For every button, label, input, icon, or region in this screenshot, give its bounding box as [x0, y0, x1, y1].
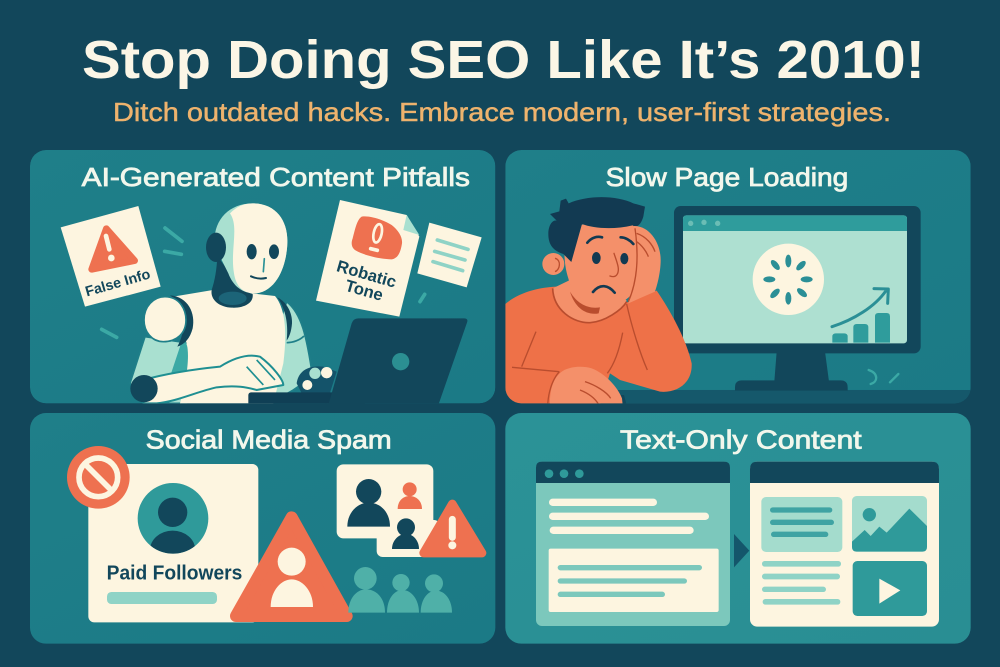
- icon: image placeholder: [852, 496, 927, 552]
- subtitle: Ditch outdated hacks. Embrace modern, user-first strategies.: [113, 97, 891, 127]
- heading: Slow Page Loading: Slow Page Loading: [606, 162, 848, 192]
- title: Stop Doing SEO Like It’s 2010!: [82, 30, 925, 90]
- icon: False Info note: False Info: [84, 267, 152, 300]
- arrow: [734, 534, 749, 567]
- rich media browser window: [750, 462, 939, 627]
- speech bubbles with users: [337, 464, 440, 557]
- heading: Social Media Spam: Social Media Spam: [146, 424, 392, 454]
- icon: laptop: [248, 318, 467, 406]
- heading: AI-Generated Content Pitfalls: AI-Generated Content Pitfalls: [82, 162, 470, 192]
- robot: [130, 203, 337, 403]
- panel: Slow Page Loading: [505, 150, 971, 405]
- decorative motion dashes: [102, 228, 425, 337]
- monitor: [674, 206, 921, 391]
- frustrated person: [505, 197, 692, 405]
- decorative marks: [869, 370, 898, 384]
- icon: large warning triangle with person: [236, 517, 347, 616]
- icon: small warning triangle: [424, 504, 482, 553]
- icon: follower silhouettes: [348, 567, 452, 613]
- desk: [618, 390, 970, 404]
- bar chart with arrow: [832, 289, 890, 343]
- icon: ban sign: [67, 446, 130, 509]
- icon: video player: [853, 561, 927, 616]
- panel: Text-Only Content: [505, 413, 971, 644]
- icon: Robotic Tone note: Robatic: [335, 256, 398, 292]
- icon: False Info note: [61, 206, 161, 307]
- panel: Social Media Spam: [30, 413, 495, 644]
- heading: Text-Only Content: Text-Only Content: [620, 424, 863, 454]
- profile card: Paid Followers: [107, 562, 242, 584]
- profile card: [88, 464, 258, 622]
- icon: small document: [417, 223, 482, 287]
- panel: AI-Generated Content Pitfalls: [30, 150, 495, 406]
- icon: Robotic Tone note: Tone: [343, 276, 385, 305]
- icon: Robotic Tone note: [316, 200, 419, 317]
- text-only browser window: [536, 462, 730, 626]
- icon: loading spinner: [753, 244, 824, 315]
